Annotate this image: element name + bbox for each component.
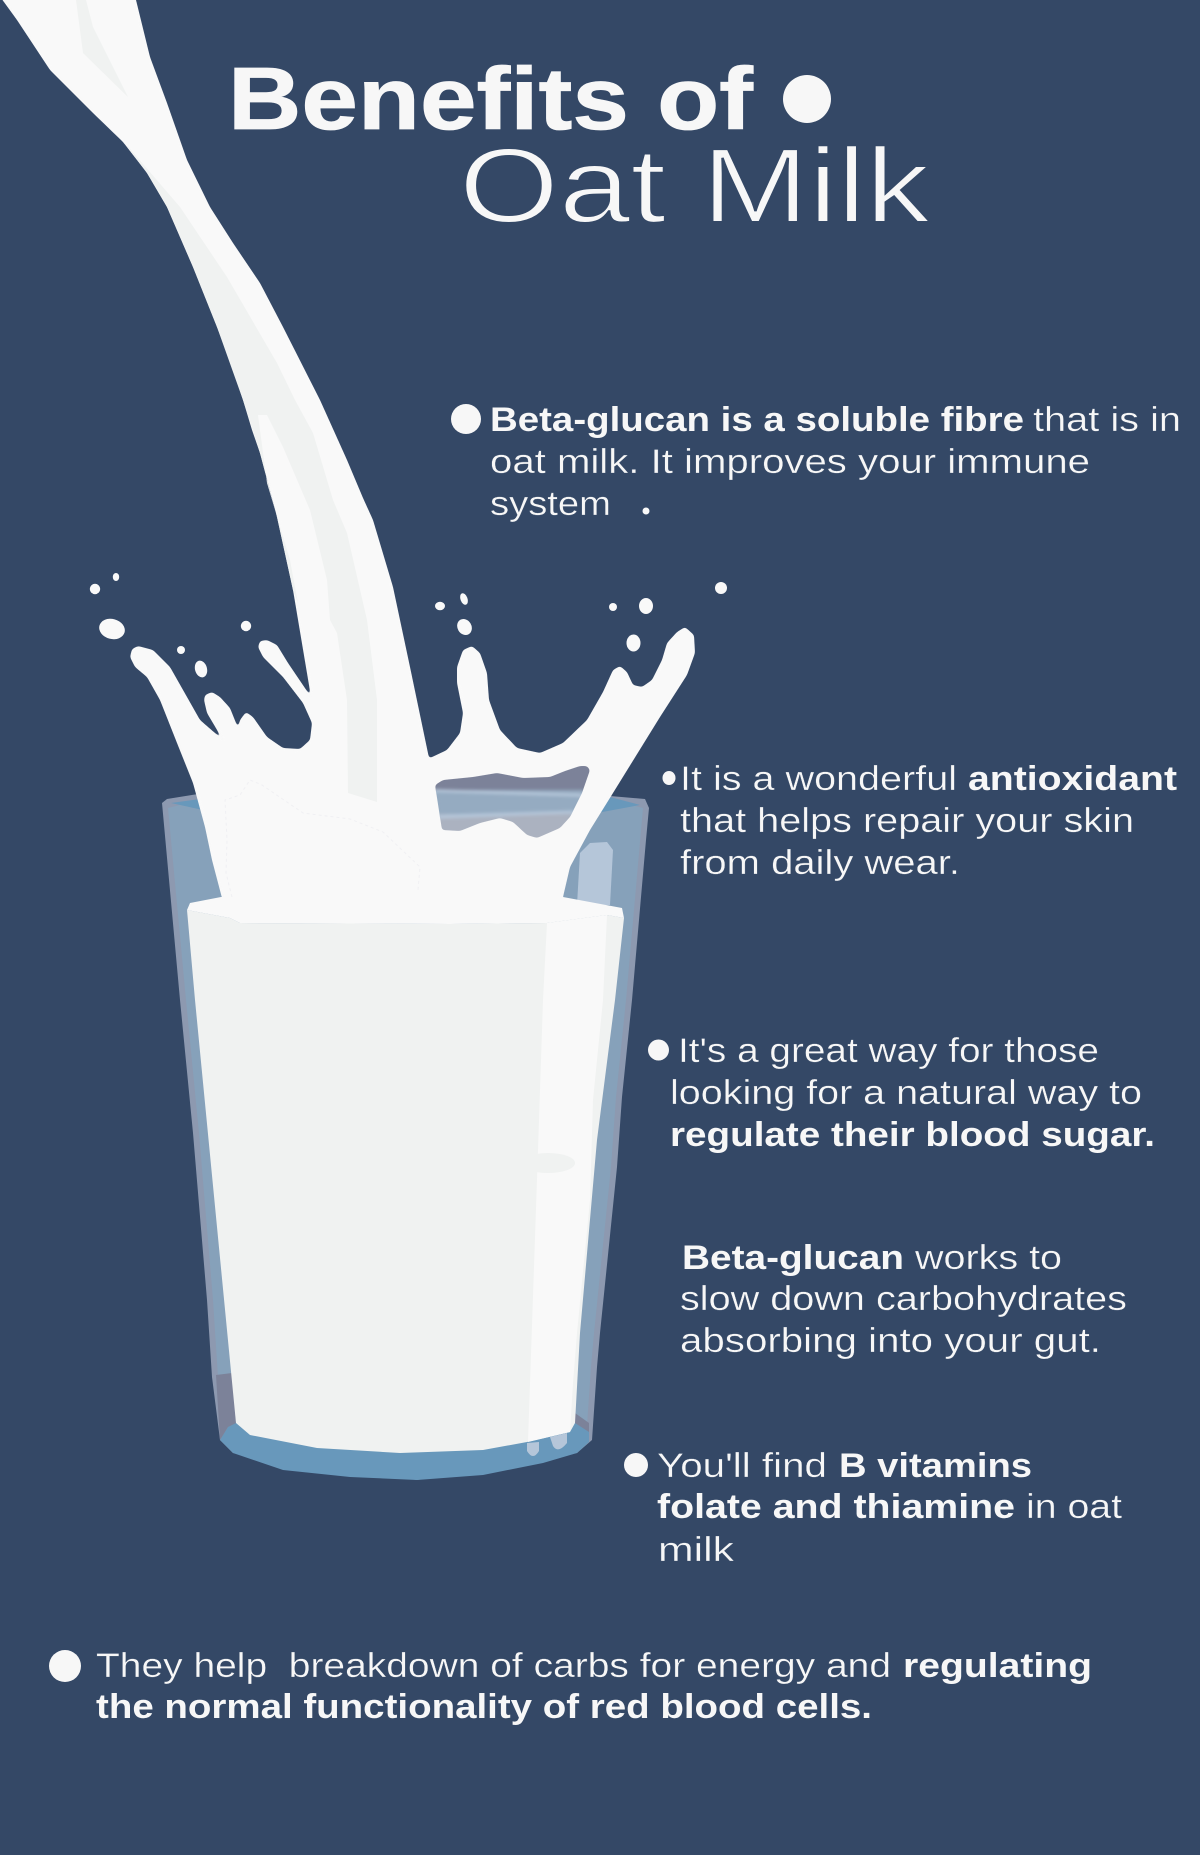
text block: folate and thiamine [657,1488,1015,1526]
text block: It is a wonderful [680,760,957,798]
milk body: lit right side [528,915,607,1442]
bullet [451,404,481,434]
benefit: carbohydrate absorption: absorbing into your gut. [680,1322,1101,1360]
text block: milk [658,1531,735,1569]
text block [680,760,1177,882]
splash crown [130,627,695,905]
text block: regulate their blood sugar. [670,1116,1155,1154]
milk stream and splash crown [0,0,695,905]
text block [490,401,1181,523]
benefit: blood sugar [648,1032,1155,1154]
text block: antioxidant [968,760,1177,798]
text block: from daily wear. [680,844,960,882]
milk drips [527,1433,567,1456]
benefit: carbohydrate absorption: Beta-glucan [682,1239,904,1277]
text block: that is in [1033,401,1181,439]
text block [670,1032,1155,1154]
text block: It's a great way for those [678,1032,1099,1070]
illustration: glass of milk with pouring stream [0,0,727,1480]
splash inner outline [225,780,420,897]
splash opening showing the glass [435,766,590,838]
text block [657,1447,1123,1569]
bullet [49,1650,81,1682]
text block: Beta-glucan is a soluble fibre [490,401,1024,439]
text block: You'll find [657,1447,827,1485]
text block [96,1647,1092,1726]
benefit: antioxidant [662,760,1177,882]
text block: that helps repair your skin [680,802,1134,840]
glass highlight [577,842,613,905]
glass bottom: blue base [220,1421,589,1480]
benefit: energy and red blood cells [49,1647,1092,1726]
bullet [648,1040,669,1060]
glass body [162,786,649,1480]
milk body [187,910,624,1453]
text block: regulating [903,1647,1092,1685]
title line 1: Benefits of [228,49,754,148]
text block: system [490,485,611,523]
benefit: carbohydrate absorption: works to [914,1239,1062,1277]
text block: oat milk. It improves your immune [490,443,1090,481]
stream shading [125,143,377,802]
title line 2: Oat Milk [459,127,931,245]
glass bottom: shaded corners [216,1373,589,1440]
text block: They help breakdown of carbs for energy and [96,1647,891,1685]
benefit: B vitamins [624,1447,1123,1569]
benefit: carbohydrate absorption [680,1239,1127,1360]
title [228,49,931,245]
benefit: carbohydrate absorption: slow down carbohydrates [680,1280,1127,1318]
milk droplets [90,508,727,679]
bullet [662,771,676,785]
milk surface [187,897,624,924]
text block: B vitamins [839,1447,1032,1485]
text block: in oat [1026,1488,1123,1526]
title dot [783,75,831,123]
text block: the normal functionality of red blood cells. [96,1688,872,1726]
text block: looking for a natural way to [670,1074,1142,1112]
milk stream [0,0,429,800]
stream shading near top [76,0,128,97]
milk body: bulge [521,1153,575,1173]
benefit: beta-glucan immune [451,401,1181,523]
bullet [624,1453,648,1477]
